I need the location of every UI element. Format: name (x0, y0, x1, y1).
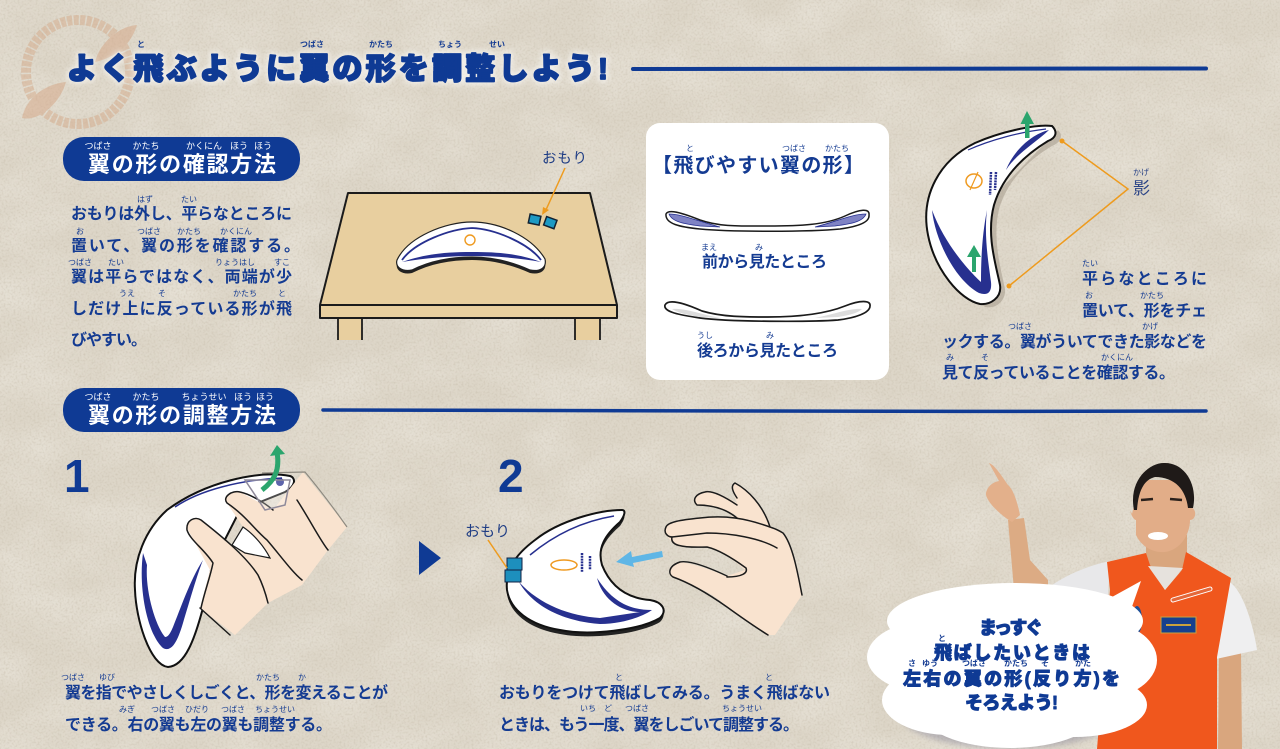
text block: check method: かくにん (220, 227, 252, 236)
title: と (137, 40, 145, 49)
title: よく飛ぶように翼の形を調整しよう! (67, 53, 608, 86)
panel: good wing shape: み (755, 243, 763, 252)
bubble text: 左右の翼の形(反り方)を (903, 668, 1120, 689)
section rule (323, 410, 1206, 411)
heading pill: check method (63, 137, 300, 181)
text block: shadow check (942, 259, 1207, 382)
text block: check method: かたち (177, 227, 201, 236)
text block: step 2: いち (580, 704, 596, 713)
heading pill: adjust method: ちょうせい (181, 392, 227, 402)
text block: shadow check: 平らなところに (1082, 270, 1207, 288)
heading pill: adjust method: かたち (132, 392, 160, 402)
text block: step 1: かたち (256, 673, 280, 682)
table (320, 193, 617, 340)
hands (187, 472, 347, 635)
label: weight: おもり (542, 150, 587, 167)
step number 2: 2 (498, 450, 524, 502)
text block: step 2: と (615, 673, 623, 682)
wing (397, 222, 545, 274)
text block: check method: はず (137, 194, 153, 204)
text block: step 2: ときは、もう一度、翼をしごいて調整する。 (499, 715, 799, 734)
title: ちょう (438, 39, 462, 49)
text block: step 2: つばさ (625, 704, 649, 713)
text block: step 1: つばさ (61, 673, 85, 682)
panel: good wing shape: うし (697, 331, 713, 340)
heading pill: check method: 翼の形の確認方法 (88, 152, 276, 177)
text block: shadow check: かげ (1142, 322, 1158, 331)
label: weight (465, 523, 510, 568)
wing back view (665, 302, 870, 321)
illustration: step 1 hands bending wing (135, 445, 347, 667)
weights (528, 214, 557, 229)
heading pill: adjust method: ほう (256, 392, 274, 402)
title: よく飛ぶように翼の形を調整しよう! (67, 53, 608, 86)
title rule (633, 66, 1206, 71)
text block: shadow check: そ (981, 353, 989, 362)
text block: step 1: ゆび (99, 673, 115, 682)
step number 1: 1 (64, 450, 90, 502)
panel: good wing shape: と (686, 144, 694, 153)
text block: step 2: おもりをつけて飛ばしてみる。うまく飛ばない (499, 684, 830, 702)
text block: shadow check: 見て反っていることを確認する。 (942, 363, 1175, 382)
bubble text (903, 618, 1120, 713)
text block: check method: すこ (274, 258, 290, 267)
illustration: step 2 attach weights (465, 483, 802, 636)
text block: step 1: か (298, 673, 306, 682)
text block: step 1: できる。右の翼も左の翼も調整する。 (65, 716, 332, 734)
panel: good wing shape: み (766, 331, 774, 340)
panel: good wing shape: 【飛びやすい翼の形】 (652, 154, 864, 177)
stamp logo (22, 20, 137, 124)
text block: step 1: ちょうせい (255, 705, 295, 714)
text block: step 1: みぎ (119, 704, 135, 714)
bubble text: まっすぐ (979, 618, 1043, 638)
text block: check method: そ (158, 289, 166, 298)
text block: shadow check: お (1085, 291, 1093, 300)
illustration: wing on table (320, 150, 617, 340)
panel: good wing shape: まえ (701, 243, 717, 252)
text block: check method: うえ (119, 289, 135, 298)
text block: check method: つばさ (68, 258, 92, 267)
wing front view (666, 210, 869, 231)
heading pill: adjust method: 翼の形の調整方法 (88, 403, 276, 428)
text block: shadow check: つばさ (1008, 322, 1032, 331)
person pointing (986, 463, 1257, 749)
hand (665, 483, 802, 635)
text block: shadow check: み (946, 353, 954, 362)
weights (505, 558, 522, 582)
heading pill: check method: かくにん (186, 141, 222, 151)
bubble text: つばさ (962, 658, 986, 668)
heading pill: check method: つばさ (84, 141, 112, 151)
heading pill: adjust method (63, 388, 300, 432)
bubble text: さ (908, 659, 916, 668)
panel: good wing shape: 後ろから見たところ (697, 341, 838, 360)
panel: good wing shape (646, 123, 889, 380)
panel: good wing shape: つばさ (782, 144, 806, 153)
wing top view (926, 126, 1061, 307)
green arrows (967, 111, 1034, 272)
label: shadow: 影 (1133, 179, 1150, 198)
title: かたち (369, 39, 393, 49)
text block: check method: おもりは外し、平らなところに (71, 204, 292, 223)
text block: check method: しだけ上に反っている形が飛 (71, 299, 292, 318)
text block: step 2: ちょうせい (722, 704, 762, 713)
arrow: light blue (616, 551, 663, 567)
arrow: next step (419, 541, 441, 575)
heading pill: check method: ほう (230, 141, 248, 151)
text block: step 1: つばさ (151, 705, 175, 714)
panel: good wing shape: 前から見たところ (702, 252, 827, 271)
label: weight (542, 150, 587, 215)
orange leader lines (1006, 138, 1128, 288)
text block: check method (68, 194, 300, 349)
bubble text: かた (1075, 658, 1091, 668)
text block: check method: 置いて、翼の形を確認する。 (71, 236, 300, 255)
text block: check method: 翼は平らではなく、両端が少 (71, 267, 292, 286)
title: つばさ (300, 39, 324, 49)
text block: shadow check: かくにん (1101, 353, 1133, 362)
text block: step 2: と (765, 673, 773, 682)
text block: check method: りょうはし (215, 258, 255, 267)
label: weight: おもり (465, 523, 510, 540)
panel: good wing shape: かたち (825, 144, 849, 153)
text block: check method: お (76, 227, 84, 236)
speech bubble (867, 581, 1157, 749)
label: shadow: かげ (1133, 168, 1149, 177)
wing (507, 510, 664, 636)
text block: check method: たい (181, 195, 197, 204)
text block: step 1 (61, 673, 388, 734)
text block: shadow check: かたち (1140, 291, 1164, 300)
text block: shadow check: たい (1082, 259, 1098, 268)
bubble text: かたち (1004, 658, 1028, 668)
bubble text: と (938, 634, 946, 643)
wing (135, 474, 294, 667)
text block: check method: たい (108, 258, 124, 267)
heading pill: check method: ほう (254, 141, 272, 151)
text block: shadow check: 置いて、形をチェ (1082, 302, 1207, 320)
text block: step 1: ひだり (185, 705, 209, 714)
heading pill: adjust method: つばさ (84, 392, 112, 402)
illustration: wing shadow check (926, 111, 1150, 307)
text block: check method: かたち (233, 289, 257, 298)
bubble text: 飛ばしたいときは (934, 643, 1090, 663)
text block: step 1: 翼を指でやさしくしごくと、形を変えることが (65, 683, 388, 702)
text block: check method: びやすい。 (71, 331, 147, 349)
bubble text: ゆう (922, 659, 938, 668)
heading pill: adjust method: ほう (234, 392, 252, 402)
text block: check method: つばさ (137, 227, 161, 236)
text block: step 2 (499, 673, 830, 734)
text block: shadow check: ックする。翼がういてできた影などを (942, 332, 1207, 351)
label: shadow (1133, 168, 1150, 198)
bubble text: そろえよう! (965, 693, 1058, 713)
bubble text: そ (1041, 659, 1049, 668)
curved arrow (262, 445, 285, 490)
title: せい (489, 40, 505, 49)
text block: check method: と (278, 289, 286, 298)
text block: step 1: つばさ (221, 705, 245, 714)
text block: step 2: ど (604, 704, 612, 713)
heading pill: check method: かたち (132, 141, 160, 151)
